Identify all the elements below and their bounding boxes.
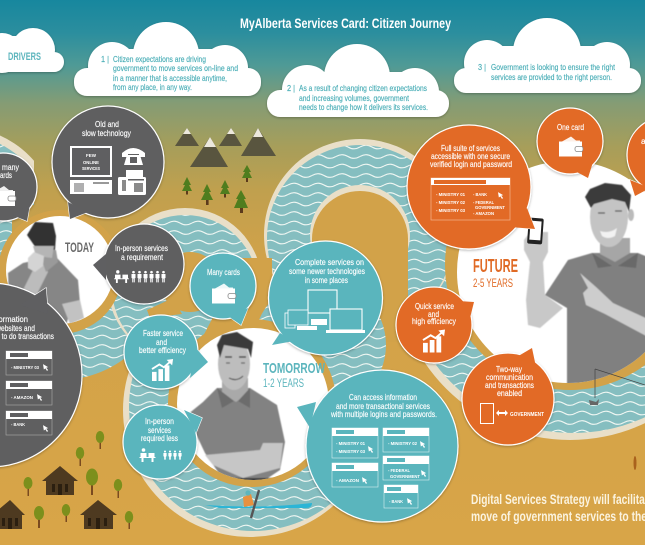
window: federal government: - FEDERAL [388, 468, 410, 473]
bubble: complete services [268, 241, 382, 355]
label: future [473, 256, 518, 290]
bubble: two-way communication: communication [486, 372, 533, 382]
window: ministry 01 and 03: - MINISTRY 03 [336, 449, 365, 454]
bubble: quick service: and [428, 309, 439, 319]
window: full service list: - AMAZON [473, 211, 495, 216]
text: driver 2 [287, 83, 428, 112]
fishing line and fish [589, 369, 645, 405]
bubble: quick service: high efficiency [412, 316, 457, 326]
text: driver 1: government to move services on-line and [113, 63, 238, 73]
circle: tomorrow backdrop [168, 319, 336, 487]
label: tomorrow: TOMORROW [263, 360, 326, 377]
text: driver 3: 3 | [478, 62, 486, 72]
window: bank [6, 411, 52, 435]
label: future: 2-5 YEARS [473, 276, 513, 290]
icon: short queue [140, 448, 182, 462]
text: driver 1: in a manner that is accessible anytime, [113, 73, 227, 83]
bubble: right edge [627, 117, 645, 196]
window: amazon [332, 463, 378, 487]
bubble: can access information: with multiple logins and passwords. [330, 409, 437, 419]
text: driver 2: As a result of changing citizen expectations [299, 83, 427, 93]
icon: growth chart [423, 330, 445, 352]
window: full service list: - MINISTRY 01 [436, 192, 465, 197]
text: driver 3: Government is looking to ensure the right [491, 62, 615, 72]
circle: future backdrop [445, 140, 645, 390]
houses [0, 466, 117, 529]
pine trees [182, 165, 252, 213]
cloud 3 [454, 18, 641, 93]
bubble: can access information: Can access information [349, 392, 417, 402]
text: driver 1: Citizen expectations are driving [113, 54, 206, 64]
window: ministry 01 and 03 [332, 428, 378, 458]
bubble: many cards tomorrow: Many cards [207, 267, 240, 277]
bubble: faster service [124, 315, 208, 389]
text: driver 1: from any place, in any way. [113, 82, 192, 92]
bubble: two-way communication [462, 348, 554, 445]
bubble: complete services: Complete services on [295, 257, 364, 267]
icon: telephone [122, 148, 145, 165]
text: driver 2: and increasing volumes, government [299, 93, 409, 103]
bubble: two-way communication: Two-way [496, 364, 523, 374]
icon: old monitor: ONLINE [83, 160, 99, 165]
icon: fax machine [118, 170, 146, 195]
label: today: TODAY [65, 239, 94, 255]
bubble: can access information: and more transactional services [336, 401, 430, 411]
title: MyAlberta Services Card: Citizen Journey [240, 15, 451, 31]
label: tomorrow: 1-2 YEARS [263, 376, 304, 390]
bubble: full suite of services: verified login and password [430, 159, 512, 169]
bubble: in-person services required less: In-person [145, 416, 174, 426]
window: ministry 03 [6, 351, 52, 375]
round trees [24, 431, 133, 529]
bubble: many cards tomorrow [190, 253, 256, 325]
window: full service list: - MINISTRY 03 [436, 208, 465, 213]
circle: today backdrop [0, 210, 122, 334]
window: ministry 02: - MINISTRY 02 [388, 441, 417, 446]
window: bank: - BANK [11, 422, 26, 427]
icon: queue of people [114, 270, 166, 283]
bubble: faster service: better efficiency [139, 345, 187, 355]
window: amazon: - AMAZON [11, 395, 34, 400]
text: driver 2: 2 | [287, 83, 295, 93]
bubble: two-way communication: enabled [497, 388, 522, 398]
person: future [524, 183, 645, 390]
text: driver 1: 1 | [101, 54, 109, 64]
bubble: one card: One card [557, 122, 584, 132]
text: driver 2: needs to change how it delivers its services. [299, 102, 428, 112]
icon: old monitor [70, 147, 112, 194]
bubble: faster service: Faster service [143, 328, 183, 338]
bubble: can access information [297, 370, 458, 522]
bubble: in-person services a requirement: a requirement [121, 252, 163, 262]
bubble: many cards today [0, 153, 37, 221]
icon: wallet [0, 186, 16, 206]
bubble: many cards today: many [2, 162, 20, 172]
cloud 2 [267, 44, 449, 117]
window: amazon: - AMAZON [336, 478, 360, 483]
window: full service list: - MINISTRY 02 [436, 200, 465, 205]
icon: devices [285, 290, 365, 333]
kayak [205, 490, 312, 518]
closing statement [471, 491, 645, 524]
window: amazon [6, 381, 52, 405]
bubble: complete services: in some places [305, 275, 348, 285]
icon: phone in hand [527, 218, 544, 245]
window: bank [384, 485, 418, 508]
bubble: old and slow technology: Old and [95, 119, 119, 129]
icon: old monitor: SERVICES [82, 166, 100, 171]
window: federal government [383, 456, 429, 480]
window: full service list: - FEDERAL [473, 200, 494, 205]
icon: wallet [559, 136, 583, 156]
bubble: in-person services required less: services [148, 425, 171, 435]
bubble: full suite of services: accessible with one secure [431, 151, 510, 161]
person: tomorrow [187, 332, 285, 486]
bubble: many cards today: ards [0, 170, 12, 180]
icon: growth chart [152, 359, 173, 381]
small marker [634, 456, 636, 470]
bubble: information on websites [0, 283, 82, 467]
bubble: one card [537, 108, 603, 178]
window: ministry 01 and 03: - MINISTRY 01 [336, 441, 365, 446]
bubble: complete services: some newer technologies [289, 266, 365, 276]
bubble: full suite of services: Full suite of services [441, 143, 500, 153]
window: full service list: - BANK [473, 192, 488, 197]
bubble: in-person services required less [123, 405, 202, 479]
text: driver 1 [101, 54, 238, 92]
cloud: drivers [0, 28, 64, 73]
bubble: in-person services required less: required less [141, 433, 178, 443]
bubble: two-way communication: and transactions [485, 380, 534, 390]
bubble: old and slow technology: slow technology [82, 128, 132, 138]
window: bank: - BANK [389, 499, 404, 504]
cloud 1 [74, 22, 261, 96]
bubble: faster service: and [156, 337, 167, 347]
window: ministry 02 [383, 428, 429, 452]
bubble: full suite of services [407, 125, 535, 249]
mountains [175, 128, 276, 167]
label: tomorrow [263, 360, 326, 390]
bubble: in-person services a requirement: In-person services [115, 243, 168, 253]
window: federal government: GOVERNMENT [390, 474, 420, 479]
window: ministry 03: - MINISTRY 03 [11, 365, 39, 370]
label: future: FUTURE [473, 256, 518, 276]
person: today [8, 222, 84, 325]
bubble: in-person services a requirement [93, 224, 184, 304]
text: driver 3: services are provided to the right person. [491, 72, 612, 82]
bubble: quick service: Quick service [415, 301, 454, 311]
icon: wallet [212, 284, 236, 304]
icon: device to government: GOVERNMENT [510, 412, 545, 418]
text: driver 3 [478, 62, 615, 82]
heading: drivers: DRIVERS [8, 51, 41, 63]
bubble: old and slow technology [52, 106, 164, 219]
window: full service list: GOVERNMENT [475, 205, 505, 210]
bubble: quick service [396, 287, 474, 363]
icon: old monitor: FEW [86, 153, 97, 158]
window: full service list [431, 178, 510, 220]
